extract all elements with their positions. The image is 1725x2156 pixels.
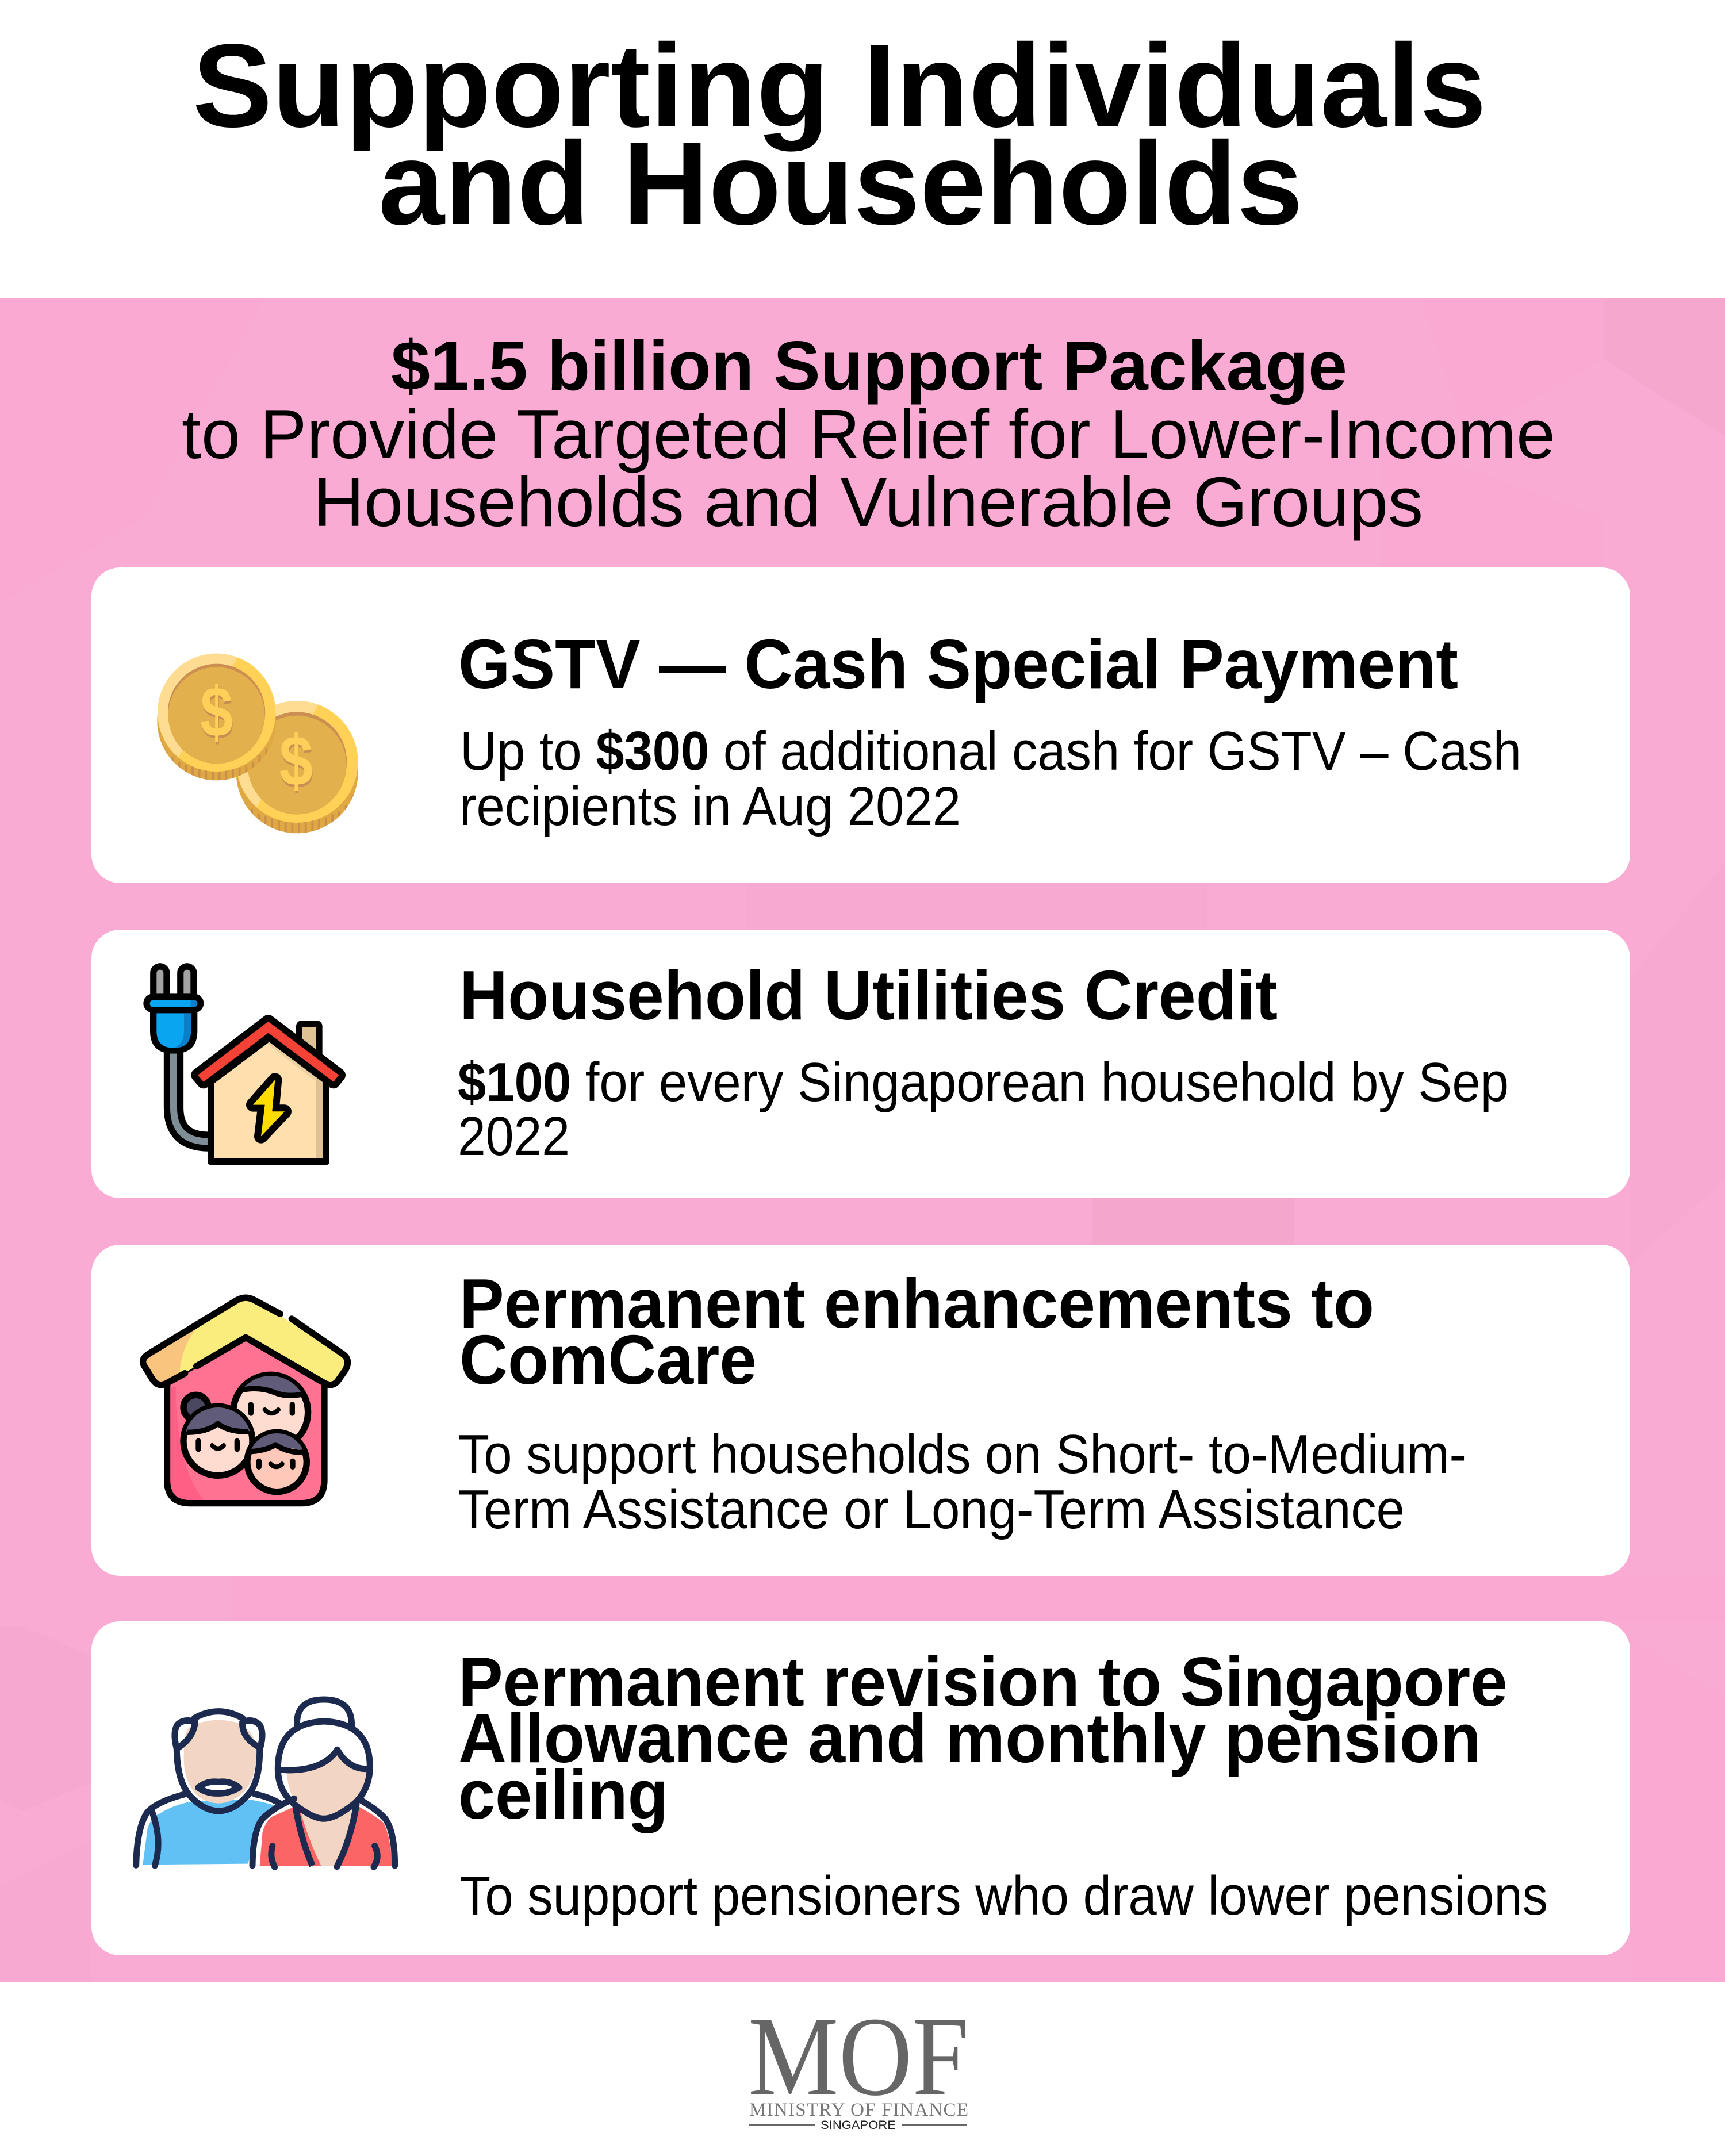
icon: gold coins <box>157 654 358 833</box>
panel: ComCare enhancements <box>91 1245 1630 1576</box>
card body text: To support households on Short- to-Medium- <box>458 1424 1466 1485</box>
icon: gold coins: $ <box>200 673 233 752</box>
MOF logo: SINGAPORE <box>821 2119 896 2132</box>
card heading <box>458 1643 1508 1833</box>
title: Supporting Individuals <box>193 20 1486 152</box>
card body text: 2022 <box>458 1106 570 1167</box>
card heading: ComCare <box>459 1321 757 1399</box>
card heading: GSTV — Cash Special Payment <box>458 625 1458 703</box>
panel: GST voucher cash special payment <box>91 567 1630 883</box>
icon: gold coins: $ <box>280 724 313 803</box>
card body text <box>458 1424 1466 1540</box>
icon: gold coins: $ <box>201 675 233 754</box>
card heading: Household Utilities Credit <box>459 956 1278 1034</box>
subtitle heading: to Provide Targeted Relief for Lower-Income <box>182 395 1555 473</box>
card heading: ceiling <box>458 1755 668 1833</box>
subtitle heading: $1.5 billion Support Package <box>391 327 1347 405</box>
icon: plug and house <box>143 973 339 1162</box>
subtitle heading: Households and Vulnerable Groups <box>313 463 1423 541</box>
panel: Singapore Allowance and pension ceiling <box>91 1621 1630 1955</box>
panel: household utilities credit <box>91 930 1630 1198</box>
title <box>193 20 1486 250</box>
MOF logo: MOF <box>748 1993 969 2119</box>
pink background band <box>0 298 1725 1982</box>
icon: gold coins: $ <box>279 722 313 801</box>
card body text: To support pensioners who draw lower pensions <box>459 1865 1548 1927</box>
card body text: $100 for every Singaporean household by Sep <box>458 1052 1509 1113</box>
subtitle heading <box>182 327 1555 541</box>
card body text <box>458 1052 1509 1167</box>
card heading: Permanent enhancements to <box>459 1264 1374 1342</box>
icon: family in house <box>143 1298 348 1503</box>
icon: elderly couple <box>136 1700 395 1867</box>
MOF logo: MINISTRY OF FINANCE <box>749 2100 968 2120</box>
card body text <box>459 720 1521 837</box>
card body text: Term Assistance or Long-Term Assistance <box>458 1479 1405 1540</box>
card heading <box>459 1264 1374 1399</box>
card heading: Allowance and monthly pension <box>458 1699 1481 1777</box>
card body text: recipients in Aug 2022 <box>459 776 961 837</box>
card heading: Permanent revision to Singapore <box>458 1643 1508 1721</box>
card body text: Up to $300 of additional cash for GSTV – Cash <box>460 720 1521 782</box>
title: and Households <box>378 117 1303 250</box>
